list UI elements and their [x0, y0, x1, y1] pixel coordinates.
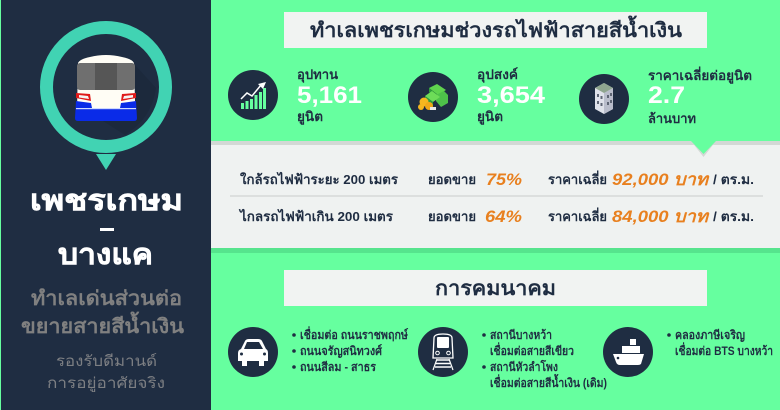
stat: demand: 3,654 — [477, 82, 546, 109]
icon: building — [579, 74, 629, 124]
list: roads — [292, 326, 408, 374]
row: beyond 200 metres: ราคาเฉลี่ย — [548, 207, 607, 224]
stat: supply: 5,161 — [297, 82, 362, 109]
icon: location pin with train — [46, 28, 166, 170]
panel: main title: ทำเลเพชรเกษมช่วงรถไฟฟ้าสายสีน้ำเงิน — [310, 15, 682, 42]
stat: average price: 2.7 — [648, 82, 685, 109]
icon: car — [228, 327, 278, 377]
stat: supply — [228, 67, 362, 125]
row: within 200 metres: ราคาเฉลี่ย — [548, 170, 607, 187]
row: beyond 200 metres: 84,000 บาท — [612, 207, 710, 226]
panel: transport heading: การคมนาคม — [435, 278, 556, 300]
stat: demand — [408, 67, 546, 125]
panel: left sidebar — [1, 0, 211, 410]
stat: supply: ยูนิต — [297, 109, 323, 125]
stat: demand: ยูนิต — [477, 109, 503, 125]
stat: average price: ล้านบาท — [648, 111, 696, 126]
icon: money pile — [408, 72, 458, 122]
row: beyond 200 metres: 64% — [485, 207, 522, 226]
row: beyond 200 metres — [238, 207, 754, 226]
icon: ship — [603, 327, 653, 377]
icon: growth chart — [228, 70, 278, 120]
stat: average price: ราคาเฉลี่ยต่อยูนิต — [648, 66, 752, 84]
stat: average price — [579, 66, 752, 126]
row: beyond 200 metres: / ตร.ม. — [713, 209, 754, 224]
icon: train on tracks — [418, 327, 468, 377]
list: boat: คลองภาษีเจริญ — [675, 328, 745, 342]
row: within 200 metres: 75% — [486, 170, 522, 189]
list: roads: เชื่อมต่อ ถนนราชพฤกษ์ — [300, 326, 408, 342]
heading: Bang Khae: บางแค — [58, 239, 153, 271]
row: within 200 metres: 92,000 บาท — [612, 170, 710, 189]
row: within 200 metres: ใกล้รถไฟฟ้าระยะ 200 เมตร — [240, 171, 398, 187]
dash — [100, 228, 114, 231]
heading: Phetkasem: เพชรเกษม — [30, 185, 183, 217]
list: rail: เชื่อมต่อสายสีเขียว — [490, 342, 574, 358]
caption line 1: รองรับดีมานด์ — [56, 353, 157, 370]
panel: main title — [284, 12, 707, 48]
list: roads: ถนนจรัญสนิทวงศ์ — [300, 344, 382, 358]
panel: transport heading — [284, 270, 707, 306]
transport: boat — [603, 327, 773, 377]
row: within 200 metres — [240, 170, 754, 189]
transport: roads — [228, 326, 408, 377]
panel: sales comparison — [211, 141, 780, 253]
list: roads: ถนนสีลม - สาธร — [300, 360, 376, 374]
stat: demand: อุปสงค์ — [477, 67, 518, 83]
list: rail: สถานีบางหว้า — [490, 328, 552, 342]
caption line 2: การอยู่อาศัยจริง — [47, 375, 165, 392]
list: rail: เชื่อมต่อสายสีน้ำเงิน (เดิม) — [490, 373, 607, 390]
transport: rail — [418, 327, 607, 390]
subheading line 2: ขยายสายสีน้ำเงิน — [21, 311, 184, 338]
list: rail — [482, 328, 607, 390]
list: boat — [667, 328, 773, 358]
subheading line 1: ทำเลเด่นส่วนต่อ — [31, 288, 182, 310]
stat: supply: อุปทาน — [297, 67, 338, 83]
row: within 200 metres: ยอดขาย — [428, 172, 476, 187]
list: rail: สถานีหัวลำโพง — [490, 359, 558, 374]
row: beyond 200 metres: ยอดขาย — [428, 209, 476, 224]
row: beyond 200 metres: ไกลรถไฟฟ้าเกิน 200 เมตร — [238, 208, 393, 224]
row: within 200 metres: / ตร.ม. — [713, 172, 754, 187]
